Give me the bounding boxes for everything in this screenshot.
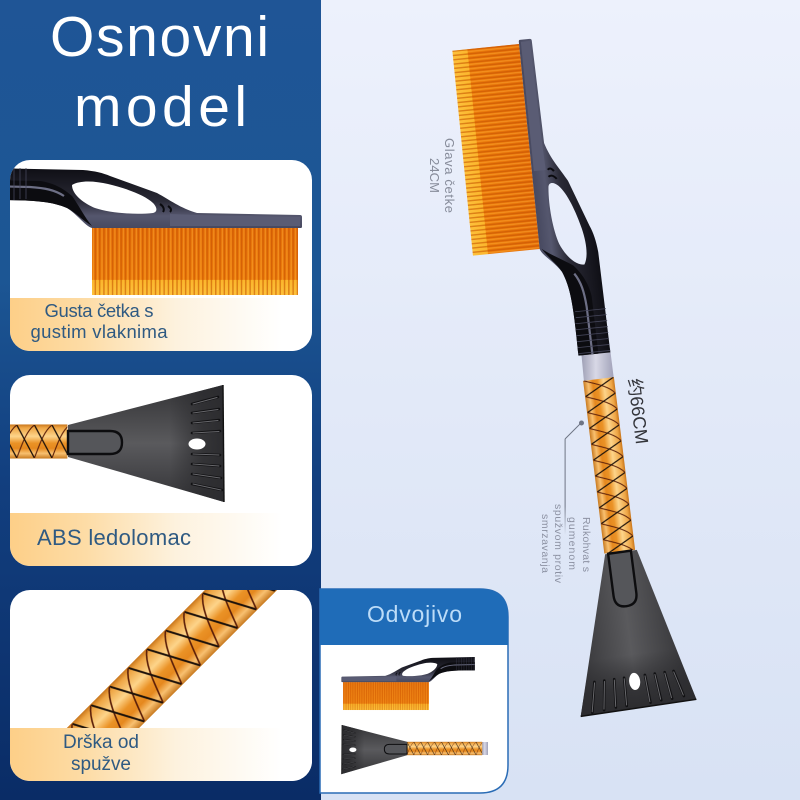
icon: detached scraper xyxy=(342,725,407,774)
panel: dense brush xyxy=(0,160,312,351)
panel: sponge handle xyxy=(10,590,312,781)
caption: brush xyxy=(30,300,168,342)
telescopic tube xyxy=(581,348,614,382)
title: Osnovni xyxy=(50,5,269,69)
label: brush head size xyxy=(427,138,457,213)
ice scraper xyxy=(561,544,697,716)
icon: sponge grip detail xyxy=(66,590,278,728)
caption: brush: Gusta četka s xyxy=(44,300,154,321)
background: left blue panel xyxy=(0,0,321,800)
panel: ABS ice scraper xyxy=(0,375,312,566)
label: handle callout: spužvom protiv xyxy=(552,504,564,584)
background: right side xyxy=(320,0,800,800)
panel header xyxy=(320,589,508,645)
label: brush head size: Glava četke xyxy=(442,138,457,213)
caption: brush: gustim vlaknima xyxy=(30,321,168,342)
label: handle callout xyxy=(539,504,592,584)
caption: handle xyxy=(64,734,138,774)
caption band: brush xyxy=(10,298,312,351)
caption: scraper: ABS ledolomac xyxy=(37,525,191,550)
label: brush head size: 24CM xyxy=(427,158,442,193)
product: full snow brush xyxy=(452,34,697,716)
title xyxy=(50,5,269,139)
icon: scraper detail xyxy=(68,385,224,502)
icon: detached tube xyxy=(482,742,488,755)
label: total length: 约66CM xyxy=(624,377,652,445)
label: handle callout: Rukohvat s xyxy=(580,517,592,572)
callout leader xyxy=(565,420,584,535)
title: model xyxy=(74,75,247,139)
label: handle callout: gumenom xyxy=(566,517,578,570)
icon: brush head detail xyxy=(0,168,302,295)
caption band: handle xyxy=(10,728,312,781)
caption band: scraper xyxy=(10,513,312,566)
brush head xyxy=(452,34,610,365)
foam grip xyxy=(583,377,635,554)
icon: detached grip xyxy=(407,742,482,755)
label: handle callout: smrzavanja xyxy=(539,514,551,573)
caption: handle: spužve xyxy=(71,754,131,775)
caption: handle: Drška od xyxy=(63,732,139,753)
icon: grip detail xyxy=(10,424,68,459)
panel heading: Odvojivo xyxy=(367,601,462,627)
panel: detachable xyxy=(320,589,508,793)
icon: detached brush xyxy=(341,657,475,710)
